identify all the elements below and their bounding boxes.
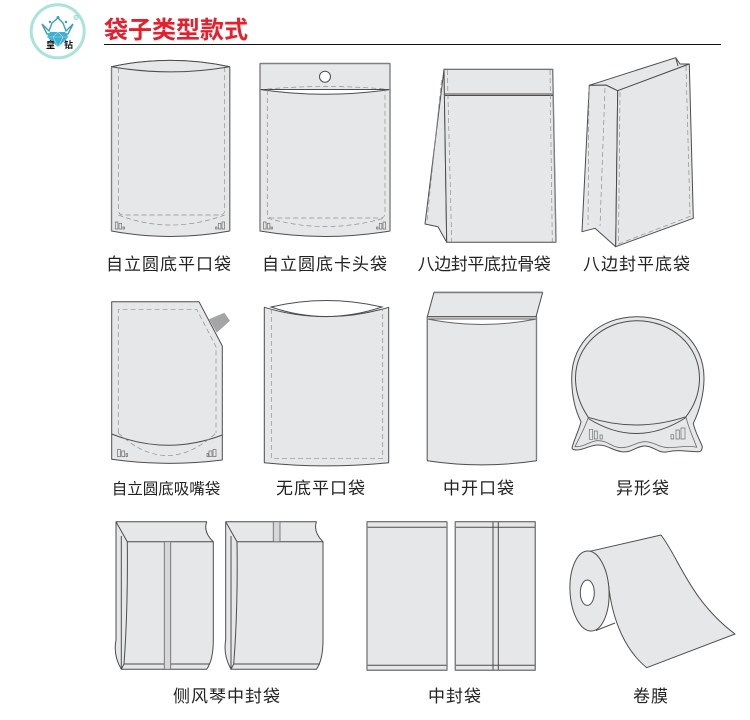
label: 卷膜 xyxy=(633,687,669,706)
label: 自立圆底吸嘴袋 xyxy=(112,480,220,498)
panel: 无底平口袋 xyxy=(264,300,389,498)
panel: 中封袋 xyxy=(367,522,535,706)
bag illustration xyxy=(425,69,556,242)
bag illustration xyxy=(260,64,390,236)
panel: 中开口袋 xyxy=(427,292,543,498)
label: 八边封平底袋 xyxy=(583,255,691,274)
panel: 卷膜 xyxy=(568,535,735,706)
panel: 异形袋 xyxy=(572,317,704,498)
bag illustration xyxy=(572,317,704,452)
label: 中封袋 xyxy=(428,687,482,706)
bag illustration xyxy=(582,58,693,247)
label: 自立圆底卡头袋 xyxy=(262,255,388,274)
panel: 自立圆底平口袋 xyxy=(106,60,232,274)
panel: 自立圆底卡头袋 xyxy=(260,64,390,274)
icon: spout xyxy=(209,313,230,333)
label: 中开口袋 xyxy=(443,479,515,498)
panel: 自立圆底吸嘴袋 xyxy=(112,302,230,498)
panel: 八边封平底袋 xyxy=(582,58,693,274)
logo: 皇 xyxy=(46,39,55,50)
label: 八边封平底拉骨袋 xyxy=(418,255,551,274)
bag illustration: back xyxy=(367,522,447,670)
film roll illustration xyxy=(568,535,735,668)
label: 无底平口袋 xyxy=(276,479,366,498)
bag illustration xyxy=(112,60,230,236)
label: 侧风琴中封袋 xyxy=(173,687,281,706)
bag illustration: front xyxy=(455,522,535,670)
panel: 八边封平底拉骨袋 xyxy=(418,69,556,274)
logo xyxy=(31,5,84,58)
bag illustration xyxy=(112,302,230,463)
logo: 钻 xyxy=(64,39,73,50)
bag illustration: back xyxy=(115,522,213,669)
bag illustration: front xyxy=(225,522,323,669)
bag illustration xyxy=(264,300,389,466)
label: 自立圆底平口袋 xyxy=(106,255,232,274)
panel: 侧风琴中封袋 xyxy=(115,522,323,706)
label: 异形袋 xyxy=(616,479,670,498)
bag illustration xyxy=(427,292,543,465)
title: 袋子类型款式 xyxy=(104,17,248,44)
